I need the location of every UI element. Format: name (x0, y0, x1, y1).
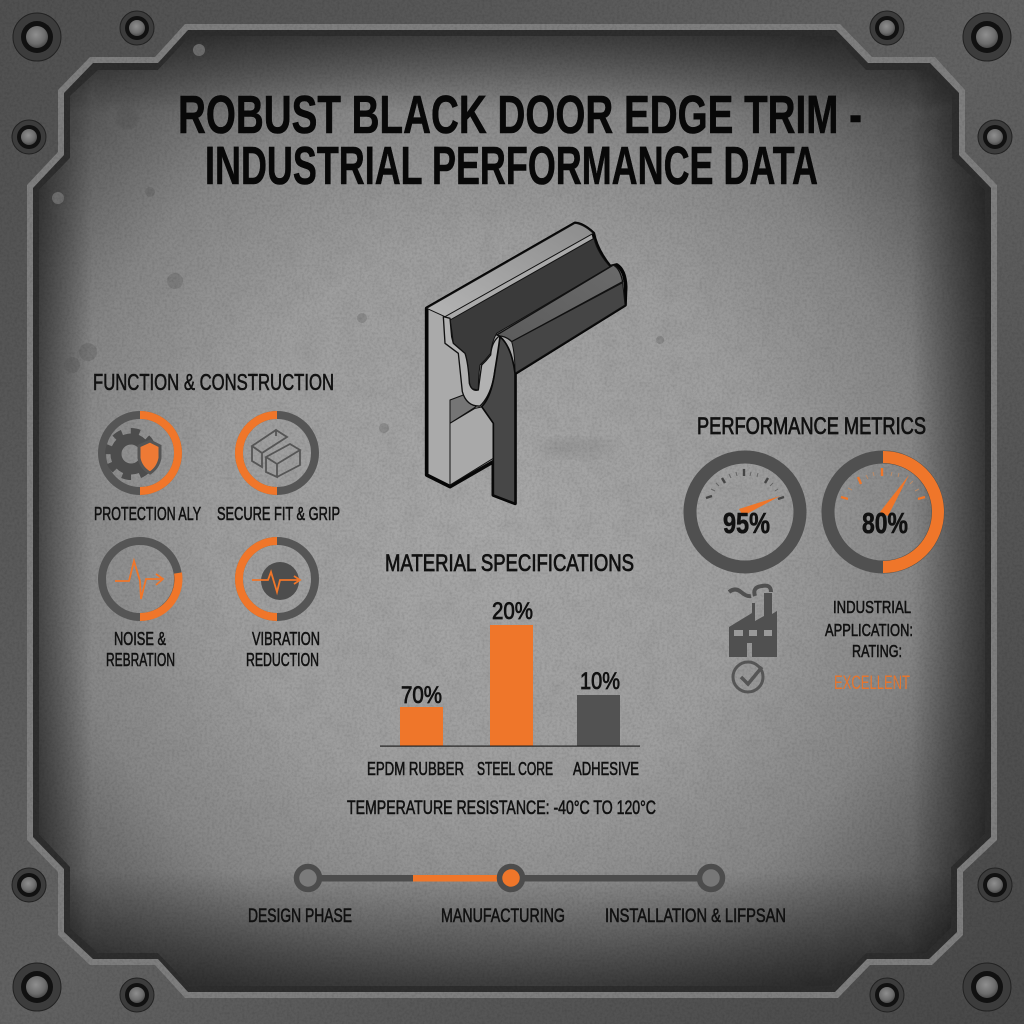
temperature note: TEMPERATURE RESISTANCE: -40°C TO 120°C (347, 797, 656, 819)
ridge top (497, 265, 623, 342)
icon: factory with check (729, 586, 777, 692)
gauge: 95%: 95% (723, 508, 770, 540)
icon: gear and shield (102, 415, 178, 491)
milestone: design phase (248, 866, 352, 927)
milestone: installation and lifespan: INSTALLATION & LIFPSAN (605, 906, 786, 927)
label: REBRATION (106, 649, 175, 670)
label (246, 628, 320, 670)
product illustration: door edge trim cross-section (427, 223, 626, 503)
panel: material specifications (347, 550, 656, 819)
clip profile (443, 317, 501, 406)
left-face edge line (448, 400, 451, 487)
lower face (450, 407, 493, 485)
trim silhouette (427, 223, 626, 503)
rating text: APPLICATION: (825, 620, 913, 640)
bar chart: 10% (580, 668, 620, 695)
panel: function and construction (93, 369, 340, 670)
bar chart: EPDM RUBBER (367, 759, 464, 779)
title (178, 85, 862, 196)
gauge: 95% (690, 457, 800, 567)
milestone: design phase: DESIGN PHASE (248, 906, 352, 927)
label: PROTECTION ALY (94, 503, 201, 524)
milestone: installation and lifespan (605, 866, 786, 927)
dark channel (450, 238, 610, 390)
gauge: 80%: 80% (862, 508, 908, 540)
icon: noise pulse (102, 541, 178, 617)
rating text: RATING: (852, 641, 902, 661)
label: NOISE & (114, 628, 166, 649)
rating text: EXCELLENT (834, 673, 910, 694)
bar chart: 70% (401, 682, 442, 709)
gauge: 80% (828, 457, 938, 567)
rating text (825, 597, 913, 694)
ridge front (512, 283, 625, 373)
bar chart: ADHESIVE (573, 759, 639, 779)
milestone: manufacturing: MANUFACTURING (441, 906, 565, 927)
label: VIBRATION (252, 628, 320, 649)
front strip (482, 337, 515, 503)
icon: vibration pulse (239, 541, 315, 617)
bar chart: 20% (492, 598, 533, 625)
icon: interlocking blocks (239, 415, 315, 491)
label: SECURE FIT & GRIP (217, 503, 340, 524)
heading: MATERIAL SPECIFICATIONS (385, 550, 634, 577)
panel: performance metrics (690, 413, 938, 694)
bar chart (367, 598, 640, 779)
milestone: manufacturing (441, 866, 565, 927)
label (106, 628, 175, 670)
top face (427, 223, 593, 317)
heading: FUNCTION & CONSTRUCTION (93, 369, 334, 395)
lower inset (450, 395, 476, 423)
rating text: INDUSTRIAL (833, 597, 911, 617)
label: REDUCTION (246, 649, 319, 670)
bar chart: STEEL CORE (477, 759, 553, 779)
timeline (248, 866, 786, 927)
heading: PERFORMANCE METRICS (697, 413, 926, 440)
